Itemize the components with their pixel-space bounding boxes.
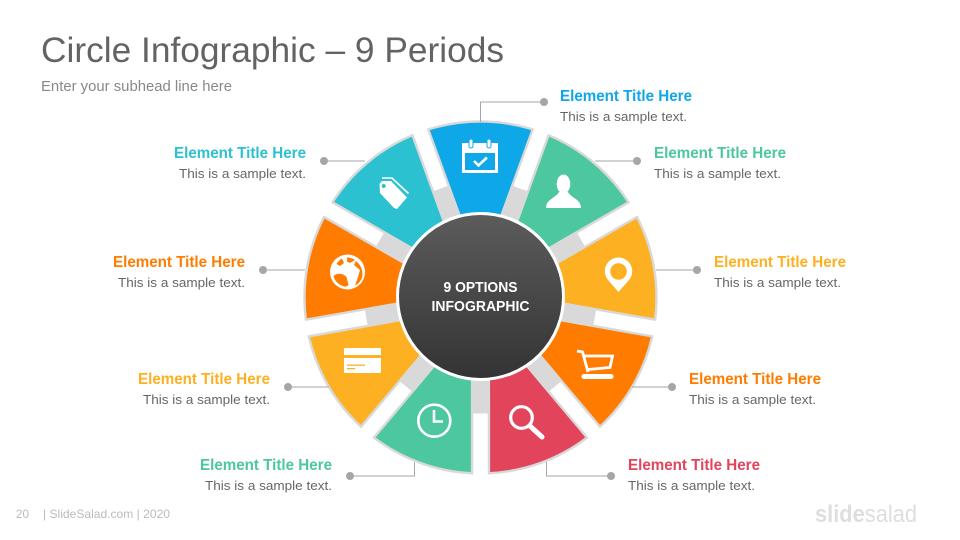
label: red	[628, 457, 760, 493]
label: orange left: Element Title Here	[113, 254, 245, 271]
icon: credit card	[344, 348, 381, 373]
gray spokes	[365, 185, 596, 414]
leader: top blue	[480, 98, 548, 122]
label: yellow left: Element Title Here	[138, 371, 270, 388]
label: orange right: Element Title Here	[689, 371, 821, 388]
label: orange left	[113, 254, 245, 290]
label: green right	[654, 145, 786, 181]
label: yellow right	[714, 254, 846, 290]
leader: orange right	[632, 383, 676, 391]
label: orange right	[689, 371, 821, 407]
segment: orange cart	[513, 286, 659, 431]
title: Circle Infographic – 9 Periods	[41, 31, 504, 70]
leader: green right	[595, 157, 641, 165]
segment: orange globe	[298, 216, 422, 337]
label: green left: This is a sample text.	[205, 478, 332, 493]
center text	[432, 279, 530, 315]
segment: cyan tag	[327, 129, 477, 279]
label: yellow right: Element Title Here	[714, 254, 846, 271]
label: green right: Element Title Here	[654, 145, 786, 162]
leader: orange left	[259, 266, 305, 274]
icon: shopping cart	[577, 351, 612, 376]
icon: person	[546, 174, 581, 208]
leader: cyan	[320, 157, 365, 165]
icon: calendar	[462, 139, 498, 173]
label: top blue: Element Title Here	[560, 88, 692, 105]
leader: red	[546, 462, 615, 480]
watermark logo: slidesalad	[815, 501, 917, 528]
label: top blue	[560, 88, 692, 124]
label: green left: Element Title Here	[200, 457, 332, 474]
center text: 9 OPTIONS	[444, 279, 518, 296]
footer: 20	[16, 507, 29, 521]
leader: yellow left	[284, 383, 329, 391]
center text: INFOGRAPHIC	[432, 298, 530, 315]
label: green left	[200, 457, 332, 493]
label: green right: This is a sample text.	[654, 166, 781, 181]
segment: green clock	[371, 344, 506, 481]
footer: | SlideSalad.com | 2020	[43, 507, 170, 521]
segment: green person	[484, 129, 634, 279]
segment: red magnifier	[455, 344, 590, 481]
icon: price tag	[380, 178, 408, 209]
label: cyan	[174, 145, 306, 181]
label: yellow left: This is a sample text.	[143, 392, 270, 407]
segment: yellow card	[302, 286, 448, 431]
leader: yellow right	[656, 266, 701, 274]
center circle	[398, 214, 564, 380]
icon: map pin	[605, 257, 632, 292]
label: yellow right: This is a sample text.	[714, 275, 841, 290]
leader: green left	[346, 462, 414, 480]
label: cyan: Element Title Here	[174, 145, 306, 162]
subhead: Enter your subhead line here	[41, 78, 232, 95]
label: orange left: This is a sample text.	[118, 275, 245, 290]
label: cyan: This is a sample text.	[179, 166, 306, 181]
label: red: Element Title Here	[628, 457, 760, 474]
icon: magnifier	[511, 407, 542, 437]
icon: globe	[330, 254, 365, 290]
label: red: This is a sample text.	[628, 478, 755, 493]
label: orange right: This is a sample text.	[689, 392, 816, 407]
segment: blue calendar	[428, 121, 533, 229]
segment: yellow pin	[539, 216, 663, 337]
label: yellow left	[138, 371, 270, 407]
label: top blue: This is a sample text.	[560, 109, 687, 124]
icon: clock	[418, 405, 450, 437]
